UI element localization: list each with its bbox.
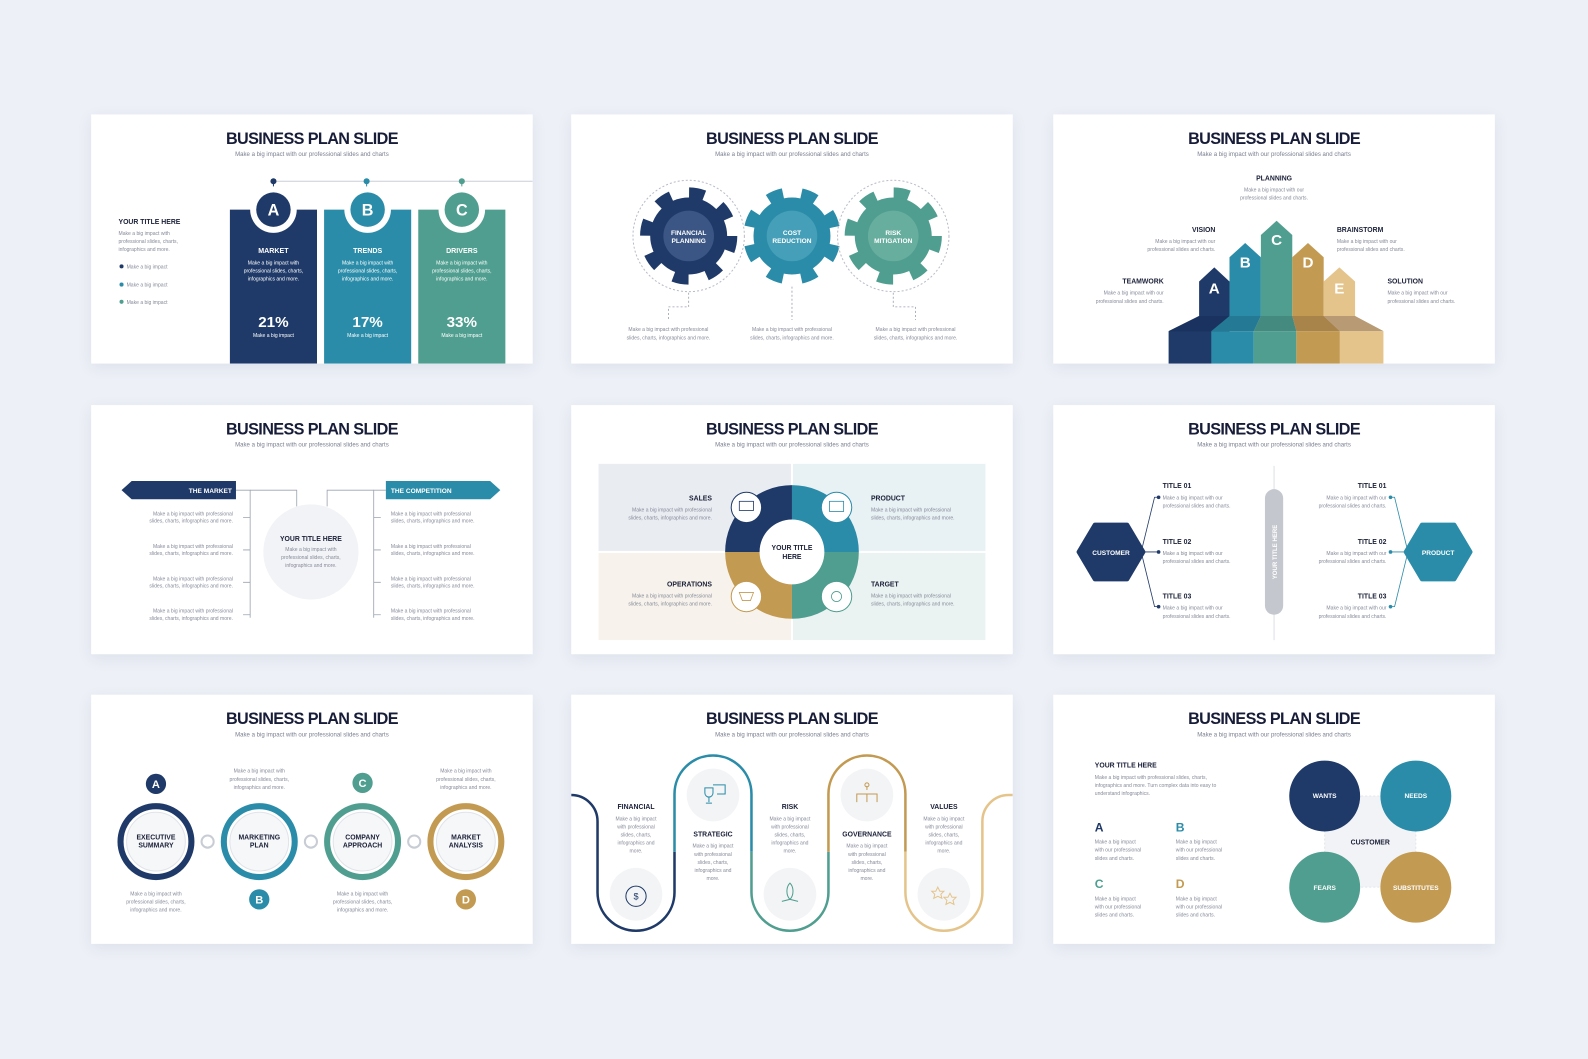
header: Make a big impact with our professional slides and charts — [715, 732, 869, 738]
label teamwork: professional slides and charts. — [1096, 299, 1164, 305]
circle company approach: C — [359, 778, 367, 790]
header: Make a big impact with our professional slides and charts — [235, 443, 389, 449]
left texts: Make a big impact with professional — [153, 511, 233, 517]
column B trends: Make a big impact with — [342, 260, 393, 266]
right titles: TITLE 02 — [1358, 539, 1387, 546]
column B trends: infographics and more. — [342, 277, 393, 283]
label solution: SOLUTION — [1387, 279, 1423, 286]
items A-D: slides and charts. — [1176, 913, 1215, 919]
column C drivers: C — [456, 202, 468, 220]
center circle: professional slides, charts, — [281, 555, 341, 561]
arrow chart: B — [1240, 254, 1251, 271]
header: Make a big impact with our professional slides and charts — [1197, 152, 1351, 158]
left texts — [149, 511, 233, 622]
slide 6: customer vs product — [1053, 405, 1495, 654]
hexagon product: PRODUCT — [1422, 550, 1454, 557]
header: BUSINESS PLAN SLIDE — [226, 130, 399, 148]
step texts: with professional — [694, 852, 732, 858]
slide 5: quadrant cycle — [571, 405, 1013, 654]
circle executive summary — [121, 774, 191, 877]
step texts: more. — [707, 876, 719, 882]
left text block: Make a big impact — [127, 264, 168, 270]
texts: professional slides, charts, — [230, 777, 289, 783]
slide 2: gears — [571, 114, 1013, 364]
hexagon customer — [1079, 525, 1143, 579]
left texts: slides, charts, infographics and more. — [149, 519, 233, 525]
label vision: Make a big impact with our — [1155, 239, 1216, 245]
circle market analysis: MARKET — [451, 835, 481, 842]
arrow chart: A — [1209, 281, 1220, 298]
left text block: YOUR TITLE HERE — [118, 219, 181, 226]
right titles: TITLE 01 — [1358, 483, 1387, 490]
circle executive summary: A — [152, 779, 160, 791]
left text block: Make a big impact with — [118, 231, 170, 237]
label solution: professional slides and charts. — [1387, 299, 1455, 305]
texts: Make a big impact with — [337, 891, 388, 897]
header: BUSINESS PLAN SLIDE — [706, 420, 879, 438]
header — [1188, 130, 1361, 158]
circles diagram: SUBSTITUTES — [1393, 885, 1439, 892]
column B trends — [324, 178, 411, 364]
right texts: Make a big impact with professional — [391, 544, 471, 550]
step texts: infographics and — [925, 841, 963, 847]
product text: Make a big impact with professional — [871, 507, 951, 513]
texts: Make a big impact with — [130, 891, 182, 897]
operations text — [628, 581, 712, 608]
label planning: PLANNING — [1256, 175, 1292, 182]
label planning — [1240, 175, 1308, 202]
sales text — [628, 495, 712, 522]
circle company approach — [327, 773, 398, 877]
arrow chart: D — [1302, 254, 1313, 271]
step texts: slides, charts, — [621, 833, 651, 839]
left text block — [118, 219, 181, 306]
step texts: slides, charts, — [775, 833, 805, 839]
column A market: A — [268, 202, 280, 220]
hexagon customer: CUSTOMER — [1092, 550, 1130, 557]
items A-D: B — [1176, 820, 1185, 834]
right texts: Make a big impact with professional — [391, 609, 471, 615]
column A market: MARKET — [258, 247, 289, 255]
right texts: slides, charts, infographics and more. — [391, 583, 475, 589]
header: BUSINESS PLAN SLIDE — [1188, 420, 1361, 438]
items A-D: with our professional — [1176, 848, 1222, 854]
column C drivers: infographics and more. — [436, 277, 487, 283]
circle executive summary: SUMMARY — [138, 843, 174, 850]
right texts: slides, charts, infographics and more. — [391, 519, 475, 525]
label vision — [1147, 227, 1216, 253]
header — [706, 710, 879, 738]
center circle — [263, 504, 359, 600]
header — [226, 420, 399, 449]
texts: infographics and more. — [337, 907, 388, 913]
gear: risk mitigation — [838, 180, 949, 292]
left intro text — [1095, 763, 1216, 797]
column C drivers: DRIVERS — [446, 247, 478, 255]
bottom texts: Make a big impact with professional — [628, 327, 708, 333]
right texts: Make a big impact with professional — [391, 576, 471, 582]
operations text: Make a big impact with professional — [632, 594, 712, 600]
circle executive summary: EXECUTIVE — [136, 835, 176, 842]
circle marketing plan: B — [255, 894, 263, 906]
step texts: Make a big impact — [923, 816, 965, 822]
left intro text: Make a big impact with professional slides, charts, — [1095, 775, 1207, 781]
step texts: Make a big impact — [769, 816, 811, 822]
banner: the market — [122, 481, 236, 499]
label brainstorm: BRAINSTORM — [1337, 227, 1384, 234]
circle market analysis: D — [462, 894, 470, 906]
header: Make a big impact with our professional slides and charts — [1197, 732, 1351, 738]
column C drivers: professional slides, charts, — [432, 268, 492, 274]
left texts: slides, charts, infographics and more. — [149, 616, 233, 622]
column C drivers — [418, 178, 505, 364]
texts: professional slides, charts, — [333, 899, 392, 905]
right texts: Make a big impact with professional — [391, 511, 471, 517]
center circle: infographics and more. — [285, 563, 337, 569]
center pill: YOUR TITLE HERE — [1273, 525, 1279, 579]
header — [706, 130, 879, 158]
left titles: TITLE 01 — [1163, 483, 1191, 490]
label brainstorm: Make a big impact with our — [1337, 239, 1397, 245]
right texts — [391, 511, 475, 622]
circle market analysis: ANALYSIS — [449, 843, 483, 850]
column C drivers: 33% — [447, 314, 478, 331]
column A market: professional slides, charts, — [244, 268, 303, 274]
step texts: FINANCIAL — [617, 804, 655, 811]
arrow chart: C — [1271, 232, 1282, 249]
right texts: slides, charts, infographics and more. — [391, 551, 475, 557]
step texts: more. — [860, 876, 873, 882]
column A market: 21% — [258, 314, 289, 331]
label teamwork: TEAMWORK — [1122, 279, 1164, 286]
step texts: Make a big impact — [846, 844, 888, 850]
header: Make a big impact with our professional slides and charts — [715, 443, 869, 449]
left texts: slides, charts, infographics and more. — [149, 583, 233, 589]
label planning: Make a big impact with our — [1244, 187, 1304, 193]
gear: financial planning — [633, 180, 744, 292]
step texts: more. — [937, 849, 950, 855]
header: Make a big impact with our professional slides and charts — [715, 152, 869, 158]
gear: risk mitigation: MITIGATION — [874, 238, 913, 245]
items A-D: C — [1095, 877, 1104, 891]
right titles: Make a big impact with our — [1326, 606, 1387, 612]
column A market — [230, 178, 317, 364]
header — [706, 420, 879, 449]
banner: the competition — [386, 481, 500, 499]
items A-D: slides and charts. — [1095, 913, 1134, 919]
items A-D: slides and charts. — [1095, 856, 1134, 862]
items A-D: A — [1095, 820, 1104, 834]
circles diagram: FEARS — [1314, 885, 1336, 892]
left titles: Make a big impact with our — [1163, 551, 1223, 557]
label teamwork — [1096, 279, 1164, 305]
gear: cost reduction: REDUCTION — [772, 238, 812, 245]
texts: professional slides, charts, — [126, 899, 186, 905]
items A-D: Make a big impact — [1176, 840, 1217, 846]
label brainstorm: professional slides and charts. — [1337, 247, 1405, 253]
step texts: slides, charts, — [928, 833, 959, 839]
banner: the competition: THE COMPETITION — [391, 488, 452, 495]
left titles — [1163, 483, 1231, 620]
step texts: with professional — [617, 824, 655, 830]
texts: Make a big impact with — [234, 769, 285, 775]
items A-D: with our professional — [1095, 904, 1141, 910]
step texts: more. — [783, 849, 796, 855]
bottom texts: slides, charts, infographics and more. — [627, 335, 710, 341]
left intro text: YOUR TITLE HERE — [1095, 763, 1157, 770]
cycle ring: HERE — [782, 554, 802, 561]
step texts: with professional — [925, 824, 963, 830]
right titles: professional slides and charts. — [1319, 559, 1386, 565]
label vision: VISION — [1192, 227, 1215, 234]
left text block: infographics and more. — [118, 247, 170, 253]
items A-D: Make a big impact — [1176, 896, 1217, 902]
left intro text: infographics and more. Turn complex data into easy to — [1095, 783, 1216, 789]
step texts: with professional — [848, 852, 886, 858]
left titles: Make a big impact with our — [1163, 495, 1223, 501]
product text: slides, charts, infographics and more. — [871, 516, 955, 522]
right titles: professional slides and charts. — [1319, 614, 1386, 620]
gear: financial planning: PLANNING — [671, 238, 706, 245]
wave line — [571, 756, 1013, 931]
target text: Make a big impact with professional — [871, 594, 951, 600]
gear: risk mitigation: RISK — [885, 230, 901, 237]
left text block: Make a big impact — [127, 283, 168, 289]
target text: TARGET — [871, 581, 900, 588]
right texts: slides, charts, infographics and more. — [391, 616, 475, 622]
left texts: Make a big impact with professional — [153, 609, 233, 615]
texts — [126, 769, 496, 913]
step texts: Make a big impact — [692, 844, 734, 850]
banner: the market: THE MARKET — [189, 488, 232, 495]
column B trends: B — [362, 202, 373, 220]
items A-D: with our professional — [1095, 848, 1141, 854]
circle market analysis — [430, 806, 501, 909]
hexagon product — [1406, 525, 1471, 579]
step texts — [616, 804, 965, 882]
header: Make a big impact with our professional slides and charts — [235, 152, 389, 158]
step texts: with professional — [771, 824, 809, 830]
header — [1188, 420, 1361, 449]
header: BUSINESS PLAN SLIDE — [706, 710, 879, 728]
bottom texts — [627, 327, 957, 341]
step texts: slides, charts, — [851, 860, 882, 866]
column A market: Make a big impact — [253, 333, 295, 339]
quadrants background — [599, 464, 985, 640]
right titles: TITLE 03 — [1358, 594, 1387, 601]
items A-D — [1095, 820, 1222, 919]
cycle ring — [725, 485, 859, 619]
items A-D: D — [1176, 877, 1185, 891]
gear: cost reduction: COST — [783, 230, 801, 237]
label vision: professional slides and charts. — [1147, 247, 1215, 253]
right titles: Make a big impact with our — [1326, 551, 1387, 557]
left texts: Make a big impact with professional — [153, 576, 233, 582]
arrow chart: E — [1334, 281, 1344, 298]
left intro text: understand infographics. — [1095, 791, 1150, 797]
circle marketing plan: PLAN — [250, 843, 269, 850]
texts: Make a big impact with — [440, 769, 492, 775]
header: BUSINESS PLAN SLIDE — [1188, 710, 1361, 728]
step texts: infographics and — [771, 841, 809, 847]
header: Make a big impact with our professional slides and charts — [1197, 443, 1351, 449]
step texts: infographics and — [617, 841, 655, 847]
label solution — [1387, 279, 1455, 305]
sales text: SALES — [689, 495, 712, 502]
step texts: Make a big impact — [616, 816, 657, 822]
arrow chart — [1169, 221, 1383, 364]
center circle: YOUR TITLE HERE — [280, 536, 342, 543]
texts: infographics and more. — [234, 785, 285, 791]
sales text: Make a big impact with professional — [632, 507, 712, 513]
step texts: infographics and — [848, 868, 886, 874]
step texts: STRATEGIC — [693, 832, 733, 839]
icon circles — [610, 769, 970, 921]
center pill — [1265, 466, 1283, 640]
column B trends: Make a big impact — [347, 333, 389, 339]
column A market: infographics and more. — [248, 277, 299, 283]
right titles: Make a big impact with our — [1326, 495, 1387, 501]
label planning: professional slides and charts. — [1240, 196, 1308, 202]
slide 1: market trends drivers — [91, 114, 533, 364]
label teamwork: Make a big impact with our — [1104, 291, 1164, 297]
left text block: Make a big impact — [127, 300, 168, 306]
slide 9: customer quadrant circles — [1053, 695, 1495, 944]
header — [226, 710, 399, 738]
label brainstorm — [1337, 227, 1405, 253]
slide 4: market vs competition — [91, 405, 533, 654]
circles diagram: CUSTOMER — [1351, 840, 1390, 847]
circle marketing plan: MARKETING — [238, 835, 280, 842]
items A-D: with our professional — [1176, 904, 1222, 910]
gear: financial planning: FINANCIAL — [671, 230, 706, 237]
step texts: RISK — [782, 804, 798, 811]
slide 7: circle process — [91, 695, 533, 944]
header: BUSINESS PLAN SLIDE — [226, 710, 399, 728]
step texts: more. — [630, 849, 642, 855]
header: BUSINESS PLAN SLIDE — [1188, 130, 1361, 148]
step texts: VALUES — [930, 804, 958, 811]
operations text: slides, charts, infographics and more. — [628, 602, 712, 608]
circles diagram: NEEDS — [1405, 793, 1428, 800]
circles diagram — [1289, 761, 1451, 923]
header — [1188, 710, 1361, 738]
bottom texts: Make a big impact with professional — [876, 327, 956, 333]
circles diagram: WANTS — [1313, 793, 1337, 800]
items A-D: Make a big impact — [1095, 896, 1136, 902]
target text — [871, 581, 955, 608]
column B trends: TRENDS — [353, 247, 382, 255]
circle company approach: COMPANY — [345, 835, 380, 842]
left text block: professional slides, charts, — [118, 239, 178, 245]
step texts: GOVERNANCE — [842, 832, 892, 839]
bottom texts: slides, charts, infographics and more. — [750, 335, 834, 341]
product text — [871, 495, 955, 522]
circle company approach: APPROACH — [343, 843, 382, 850]
target text: slides, charts, infographics and more. — [871, 602, 955, 608]
bottom texts: Make a big impact with professional — [752, 327, 832, 333]
operations text: OPERATIONS — [667, 581, 712, 588]
step texts: infographics and — [694, 868, 732, 874]
slide 8: wave timeline — [571, 695, 1013, 944]
gear: cost reduction — [742, 186, 842, 286]
texts: infographics and more. — [440, 785, 492, 791]
right titles: professional slides and charts. — [1319, 503, 1386, 509]
left titles: professional slides and charts. — [1163, 503, 1231, 509]
slide 3: arrows — [1053, 114, 1495, 364]
texts: professional slides, charts, — [436, 777, 496, 783]
left titles: TITLE 02 — [1163, 539, 1191, 546]
circle marketing plan — [224, 806, 295, 909]
product text: PRODUCT — [871, 495, 906, 502]
center circle: Make a big impact with — [285, 547, 337, 553]
items A-D: slides and charts. — [1176, 856, 1215, 862]
header: BUSINESS PLAN SLIDE — [226, 420, 399, 438]
sales text: slides, charts, infographics and more. — [628, 516, 712, 522]
left titles: professional slides and charts. — [1163, 614, 1231, 620]
column A market: Make a big impact with — [248, 260, 299, 266]
texts: infographics and more. — [130, 907, 182, 913]
left titles: TITLE 03 — [1163, 594, 1191, 601]
header — [226, 130, 399, 158]
step texts: slides, charts, — [698, 860, 728, 866]
column B trends: 17% — [352, 314, 383, 331]
column B trends: professional slides, charts, — [338, 268, 397, 274]
column C drivers: Make a big impact — [441, 333, 483, 339]
left texts: Make a big impact with professional — [153, 544, 233, 550]
label solution: Make a big impact with our — [1387, 291, 1448, 297]
items A-D: Make a big impact — [1095, 840, 1136, 846]
header: BUSINESS PLAN SLIDE — [706, 130, 879, 148]
left titles: professional slides and charts. — [1163, 559, 1231, 565]
cycle ring: YOUR TITLE — [772, 545, 813, 552]
header: Make a big impact with our professional slides and charts — [235, 732, 389, 738]
left texts: slides, charts, infographics and more. — [149, 551, 233, 557]
column C drivers: Make a big impact with — [436, 260, 488, 266]
slide 8: wave timeline: $ — [633, 891, 639, 901]
left titles: Make a big impact with our — [1163, 606, 1223, 612]
bottom texts: slides, charts, infographics and more. — [874, 335, 957, 341]
right titles — [1319, 483, 1387, 620]
